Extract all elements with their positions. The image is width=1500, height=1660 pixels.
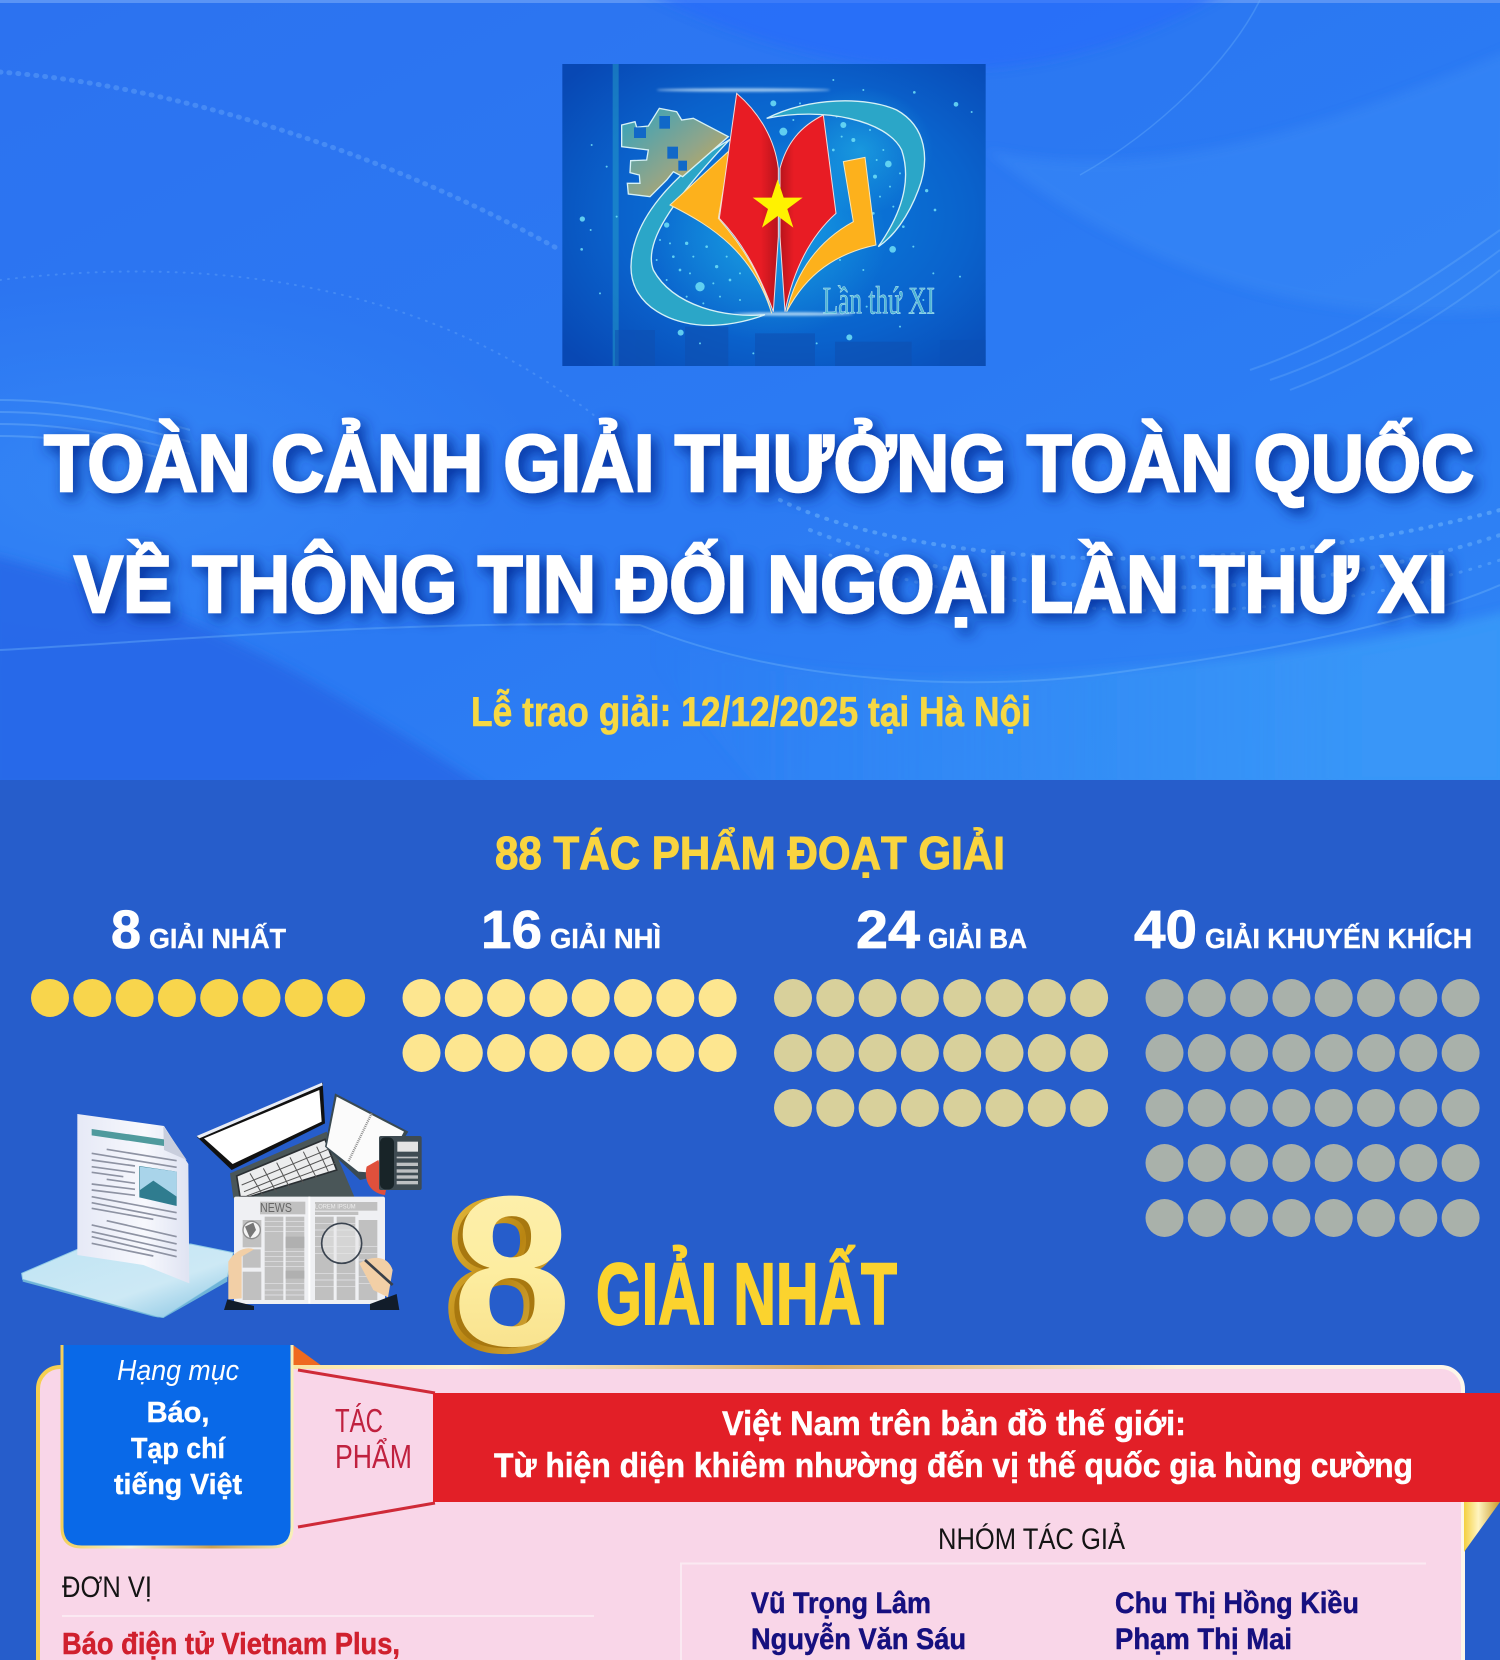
author group block: Phạm Thị Mai xyxy=(1115,1623,1292,1656)
logo caption: Lần thứ XI xyxy=(823,278,935,322)
work title banner xyxy=(433,1393,1500,1502)
big number 8: 8 xyxy=(444,1156,564,1395)
big number 8: 8 xyxy=(452,1152,572,1391)
logo: Lần thứ XI emblem xyxy=(562,64,986,366)
teal swoosh left xyxy=(631,139,765,325)
dot chart: third prizes xyxy=(774,979,1108,1127)
prize label: 40 consolation prizes: 40 xyxy=(1134,900,1197,960)
icon: document on glass plate: NEWS xyxy=(260,1201,292,1215)
category tab: Hạng mục xyxy=(117,1355,239,1387)
category tab: Báo, xyxy=(147,1397,209,1429)
author group block xyxy=(681,1522,1426,1660)
dot chart: first prizes xyxy=(31,979,365,1017)
author group block: Vũ Trọng Lâm xyxy=(751,1587,931,1620)
category tab: Tạp chí xyxy=(131,1433,226,1465)
newspaper xyxy=(234,1197,385,1304)
title xyxy=(44,418,1474,630)
category tab xyxy=(62,1345,292,1547)
magnifier xyxy=(322,1223,362,1263)
teal swoosh right xyxy=(767,101,925,247)
author group block: Chu Thị Hồng Kiều xyxy=(1115,1587,1359,1620)
prize label: 8 first prizes xyxy=(111,900,286,960)
prize label: 8 first prizes: 8 xyxy=(111,900,141,960)
header background xyxy=(0,0,1500,790)
prize label: 16 second prizes xyxy=(481,900,661,960)
card body xyxy=(38,1367,1463,1660)
label: work: PHẨM xyxy=(335,1438,412,1475)
hands xyxy=(228,1248,254,1299)
subtitle: ceremony date: Lễ trao giải: 12/12/2025 tại Hà Nội xyxy=(471,687,1031,735)
label: work xyxy=(336,1403,410,1468)
gold ribbon fold xyxy=(1464,1502,1500,1552)
mosaic pattern xyxy=(622,108,728,197)
unit block: ĐƠN VỊ xyxy=(62,1571,152,1604)
author group block: NHÓM TÁC GIẢ xyxy=(938,1522,1125,1556)
heading: 88 award-winning works: 88 TÁC PHẨM ĐOẠT GIẢI xyxy=(495,827,1005,879)
prize label: 40 consolation prizes xyxy=(1134,900,1472,960)
dot chart: consolation prizes xyxy=(1146,979,1480,1237)
unit block xyxy=(62,1571,594,1660)
star field xyxy=(580,79,973,354)
icon: document on glass plate: LOREM IPSUM xyxy=(315,1205,356,1211)
red book pages xyxy=(719,93,778,312)
notebook xyxy=(325,1093,408,1180)
yellow star xyxy=(753,179,803,228)
work title banner: Từ hiện diện khiêm nhường đến vị thế quốc gia hùng cường xyxy=(494,1447,1413,1485)
prize label: 24 third prizes: 24 xyxy=(856,900,920,960)
prize label: 16 second prizes: 16 xyxy=(481,900,542,960)
prize label: 24 third prizes xyxy=(856,900,1027,960)
prize label: 24 third prizes: GIẢI BA xyxy=(928,922,1027,954)
author group block: Nguyễn Văn Sáu xyxy=(751,1622,966,1656)
prize label: 40 consolation prizes: GIẢI KHUYẾN KHÍCH xyxy=(1205,922,1472,954)
icon: document on glass plate xyxy=(22,1083,422,1318)
label: work: TÁC xyxy=(335,1402,383,1439)
unit block: Báo điện tử Vietnam Plus, xyxy=(62,1626,400,1660)
panel: first prize entry xyxy=(38,1345,1500,1660)
prize label: 16 second prizes: GIẢI NHÌ xyxy=(550,922,661,954)
desk phone xyxy=(379,1136,422,1190)
orange corner fold xyxy=(294,1345,320,1365)
work title banner: Việt Nam trên bản đồ thế giới: xyxy=(722,1405,1186,1443)
dot chart: second prizes xyxy=(402,979,737,1072)
laptop xyxy=(230,1132,355,1198)
orange book pages xyxy=(670,150,772,313)
prize label: 8 first prizes: GIẢI NHẤT xyxy=(149,922,286,954)
big heading: first prizes: GIẢI NHẤT xyxy=(596,1246,897,1343)
category tab: tiếng Việt xyxy=(114,1469,242,1501)
connector lines xyxy=(298,1370,435,1527)
